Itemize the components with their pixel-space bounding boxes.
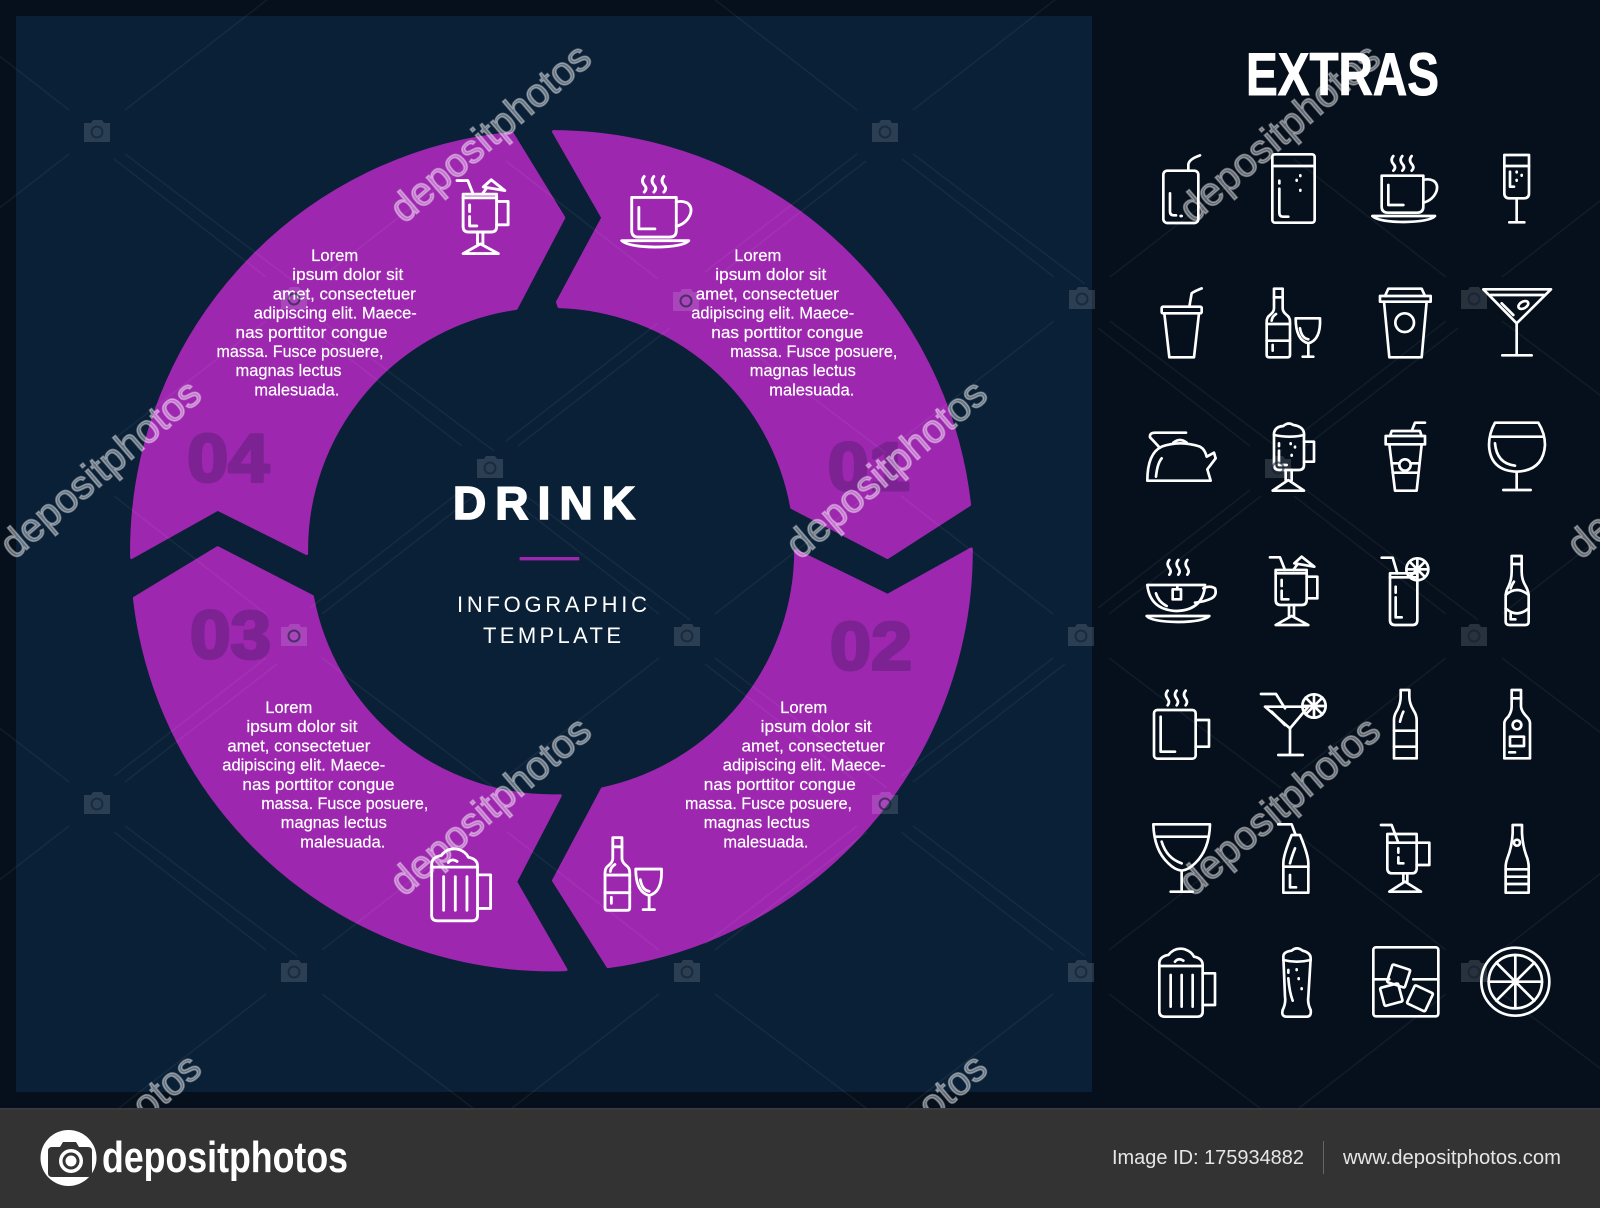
text block 04: malesuada. (254, 381, 339, 399)
watermark overlay: depositphotos (381, 708, 600, 904)
icon: bottle and wine glass on segment 02 (605, 838, 662, 910)
icon: champagne flute (1504, 155, 1529, 222)
text block 03: malesuada. (300, 833, 385, 851)
text block 01: nas porttitor congue (711, 324, 863, 342)
text block 04: ipsum dolor sit (292, 266, 404, 284)
icon: labelled bottle (1504, 690, 1530, 758)
text block 03: ipsum dolor sit (246, 718, 358, 736)
icon: tall glass (1272, 154, 1315, 223)
text block 02: malesuada. (723, 833, 808, 851)
icon: cocktail with citrus (1261, 694, 1326, 755)
text block 01: Lorem (734, 247, 781, 265)
text block 03: magnas lectus (281, 814, 387, 832)
text block 03 (222, 699, 428, 851)
subtitle: infographic template (457, 592, 647, 648)
icon grid: extras rows 1 to 3 (1147, 154, 1551, 491)
icon: citrus slice (1481, 948, 1549, 1016)
icon: plain bottle (1394, 690, 1417, 758)
watermark overlay: depositphotos (381, 35, 600, 231)
footer image id: Image ID: 175934882 (1112, 1147, 1304, 1169)
icon: mug with straw on pedestal (1381, 825, 1429, 892)
segment 02: bottom right arrow (554, 549, 971, 967)
text block 04: magnas lectus (236, 362, 342, 380)
text block 03: amet, consectetuer (227, 737, 371, 755)
text block 01: massa. Fusce posuere, (730, 343, 897, 361)
text block 01: magnas lectus (750, 362, 856, 380)
icon: can with straw (1163, 155, 1200, 223)
icon: whisky glass with ice (1373, 947, 1438, 1016)
text block 03: Lorem (265, 699, 312, 717)
icon: tall glass with citrus (1382, 558, 1428, 625)
number 04: 04 (187, 421, 269, 497)
footer logo wordmark: depositphotos (102, 1133, 348, 1182)
icon: tall beer glass (1282, 948, 1311, 1017)
icon grid: extras rows 4 to 7 (1147, 556, 1549, 1017)
text block 01 (691, 247, 897, 399)
heading: extras: EXTRAS (1246, 41, 1439, 108)
icon: kettle (1147, 433, 1216, 481)
icon: coffee cup on segment 01 (622, 176, 691, 247)
text block 04: nas porttitor congue (236, 324, 388, 342)
text block 02: massa. Fusce posuere, (685, 795, 852, 813)
subtitle: infographic template: INFOGRAPHIC (457, 592, 647, 617)
text block 02: adipiscing elit. Maece- (723, 757, 886, 775)
icon: foamy mug on pedestal (1273, 424, 1314, 491)
number 01: 01 (828, 429, 910, 505)
segment 01: top right arrow (554, 132, 970, 558)
icon: beer bottle (1506, 556, 1529, 625)
segment 03: bottom left arrow (134, 548, 566, 970)
icon: coffee cup (1372, 156, 1437, 222)
text block 03: adipiscing elit. Maece- (222, 757, 385, 775)
text block 03: nas porttitor congue (242, 776, 394, 794)
text block 01: amet, consectetuer (696, 285, 839, 303)
icon: champagne bottle (1506, 825, 1529, 893)
footer logo icon (40, 1130, 96, 1186)
icon: beer mug on segment 03 (432, 849, 491, 921)
title underline (520, 557, 579, 560)
segment 04: top left arrow (132, 133, 564, 558)
icon: martini glass (1483, 289, 1551, 355)
footer bar (0, 1108, 1600, 1208)
text block 02: Lorem (780, 699, 827, 717)
text block 04: amet, consectetuer (273, 285, 416, 303)
icon: takeaway coffee (1380, 289, 1431, 357)
text block 01: ipsum dolor sit (715, 266, 827, 284)
watermark overlay: depositphotos (1170, 708, 1389, 904)
icon: cocktail mug on segment 04 (457, 180, 508, 254)
text block 02: ipsum dolor sit (761, 718, 872, 736)
watermark overlay: depositphotos (1170, 35, 1389, 231)
text block 04: Lorem (311, 247, 358, 265)
panel: infographic background (16, 16, 1092, 1092)
text block 02: magnas lectus (704, 814, 810, 832)
icon: paper cup with straw (1162, 288, 1202, 357)
icon: cocktail mug (1270, 557, 1317, 625)
text block 01: malesuada. (769, 381, 854, 399)
icon: goblet (1153, 824, 1210, 892)
text block 01: adipiscing elit. Maece- (691, 305, 854, 323)
subtitle: infographic template: TEMPLATE (483, 623, 621, 648)
text block 04: massa. Fusce posuere, (216, 343, 384, 361)
icon: bottle and glass (1267, 289, 1320, 357)
text block 04: adipiscing elit. Maece- (254, 305, 417, 323)
text block 02 (685, 699, 886, 851)
watermark overlay: depositphotos (777, 371, 996, 567)
footer website: www.depositphotos.com (1342, 1147, 1561, 1169)
icon: takeaway cup with straw (1386, 423, 1425, 491)
text block 02: amet, consectetuer (742, 737, 885, 755)
text block 02: nas porttitor congue (704, 776, 856, 794)
title: DRINK: DRINK (453, 477, 635, 529)
icon: wine glass (1489, 423, 1545, 490)
number 02: 02 (830, 608, 912, 684)
text block 03: massa. Fusce posuere, (261, 795, 428, 813)
icon: soda bottle with straw (1278, 824, 1308, 893)
icon: mug with steam (1154, 691, 1209, 759)
icon: beer mug (1159, 949, 1215, 1017)
icon: tea cup (1147, 560, 1216, 622)
text block 04 (216, 247, 417, 399)
number 03: 03 (190, 597, 271, 673)
